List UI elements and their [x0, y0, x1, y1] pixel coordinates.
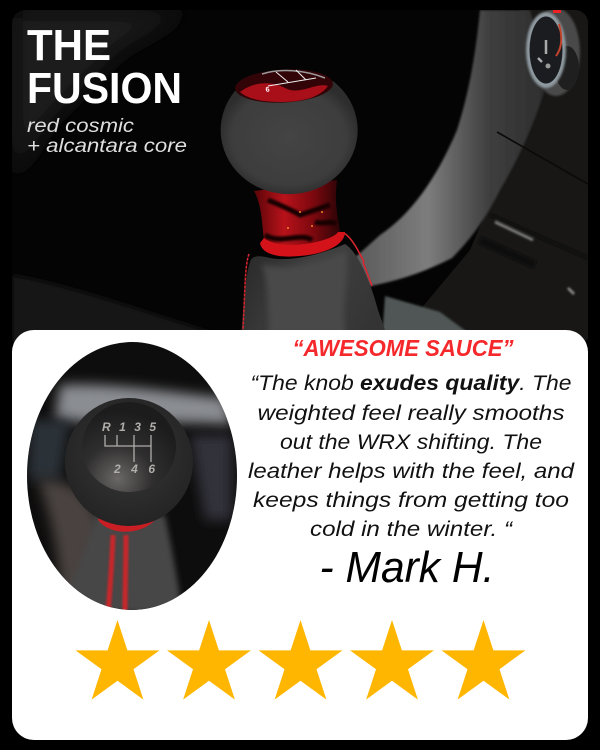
left interior shadow	[12, 10, 166, 158]
star 4	[350, 620, 434, 700]
star 2	[167, 620, 251, 700]
resin top cap with shift pattern: 6	[265, 86, 270, 94]
vent slats	[480, 215, 588, 294]
shift pattern: 246	[113, 462, 155, 476]
dark console panel at right	[423, 10, 588, 340]
review quote: keeps things from getting too	[253, 489, 569, 512]
blurred background band	[55, 384, 232, 425]
blurred boot surround	[38, 480, 108, 612]
shift pattern	[102, 420, 156, 476]
red ring	[260, 232, 345, 257]
alcantara ball	[221, 81, 358, 194]
lower left console	[12, 276, 206, 343]
subtitle	[27, 116, 187, 157]
review quote: out the WRX shifting. The	[280, 431, 542, 454]
blurred console	[28, 420, 70, 480]
review quote	[248, 372, 576, 541]
panel: hero photo of shift knob	[12, 8, 588, 350]
star 1	[76, 620, 160, 700]
climate dial	[526, 8, 580, 96]
reviewer name: - Mark H.	[320, 543, 494, 592]
boot of shifter	[242, 232, 385, 330]
review quote: cold in the winter. “	[310, 518, 513, 541]
knob top cap	[82, 402, 176, 492]
heading: The Fusion: FUSION	[27, 64, 182, 113]
review headline: “AWESOME SAUCE”	[292, 335, 514, 361]
subtitle: red cosmic	[27, 116, 135, 137]
red cosmic resin neck	[254, 180, 340, 246]
shift pattern: R135	[102, 420, 156, 434]
review quote: leather helps with the feel, and	[248, 460, 576, 483]
red stitching	[108, 535, 126, 612]
review quote: weighted feel really smooths	[258, 402, 565, 425]
star 3	[258, 620, 342, 700]
console seam line	[497, 132, 588, 184]
red collar	[98, 518, 155, 532]
five star rating	[76, 620, 526, 700]
grey console trim swoosh	[350, 10, 544, 287]
resin top cap with shift pattern	[235, 69, 333, 103]
panel: review card	[12, 330, 588, 740]
star 5	[442, 620, 526, 700]
inset oval photo of knob	[25, 340, 240, 612]
heading: The Fusion: THE	[27, 21, 111, 70]
boot	[64, 515, 182, 612]
shifter base trim	[382, 295, 466, 330]
heading: The Fusion	[27, 21, 182, 113]
knob ball	[65, 398, 193, 526]
subtitle: + alcantara core	[27, 136, 187, 157]
review quote: “The knob exudes quality . The	[250, 372, 572, 395]
